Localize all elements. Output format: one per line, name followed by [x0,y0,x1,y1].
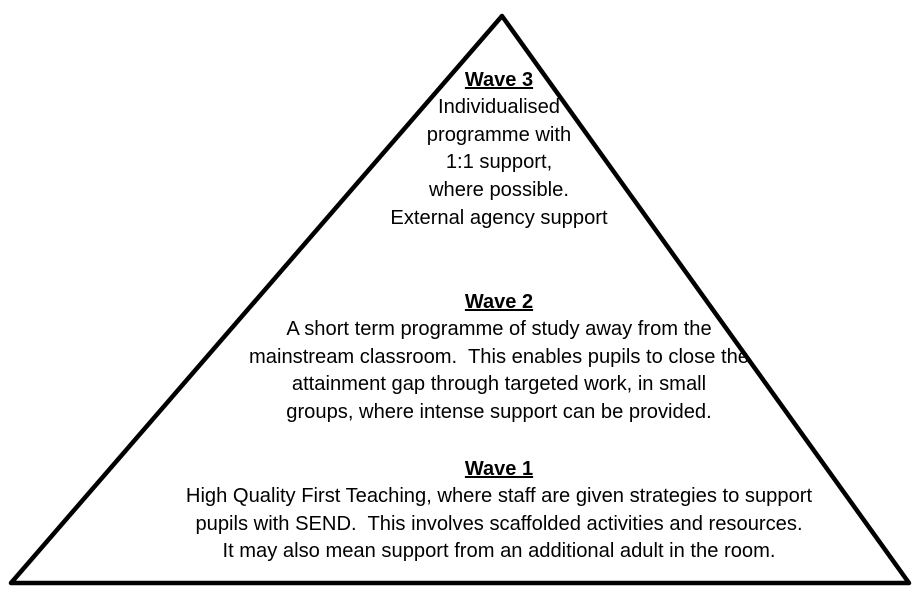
Wave 3 description: 1:1 support, [446,151,552,173]
heading: Wave 1: Wave 1 [465,458,533,480]
Wave 2 description: A short term programme of study away from the [286,318,712,340]
Wave 3 description: Individualised [438,96,560,118]
Wave 3 description: External agency support [390,207,608,229]
Wave 1 description: High Quality First Teaching, where staff are given strategies to support [186,485,812,507]
Wave 3 description [390,96,608,229]
Wave 2 description: mainstream classroom. This enables pupils to close the [249,346,749,368]
Wave 1 description: pupils with SEND. This involves scaffolded activities and resources. [195,513,803,535]
heading: Wave 2: Wave 2 [465,291,533,313]
Wave 2 description: groups, where intense support can be provided. [286,401,712,423]
Wave 3 description: programme with [427,124,571,146]
Wave 2 description: attainment gap through targeted work, in small [292,373,706,395]
Wave 3 description: where possible. [429,179,569,201]
Wave 1 description: It may also mean support from an additional adult in the room. [222,540,776,562]
Wave 2 description [249,318,749,423]
Wave 1 description [186,485,812,562]
heading: Wave 3: Wave 3 [465,69,533,91]
